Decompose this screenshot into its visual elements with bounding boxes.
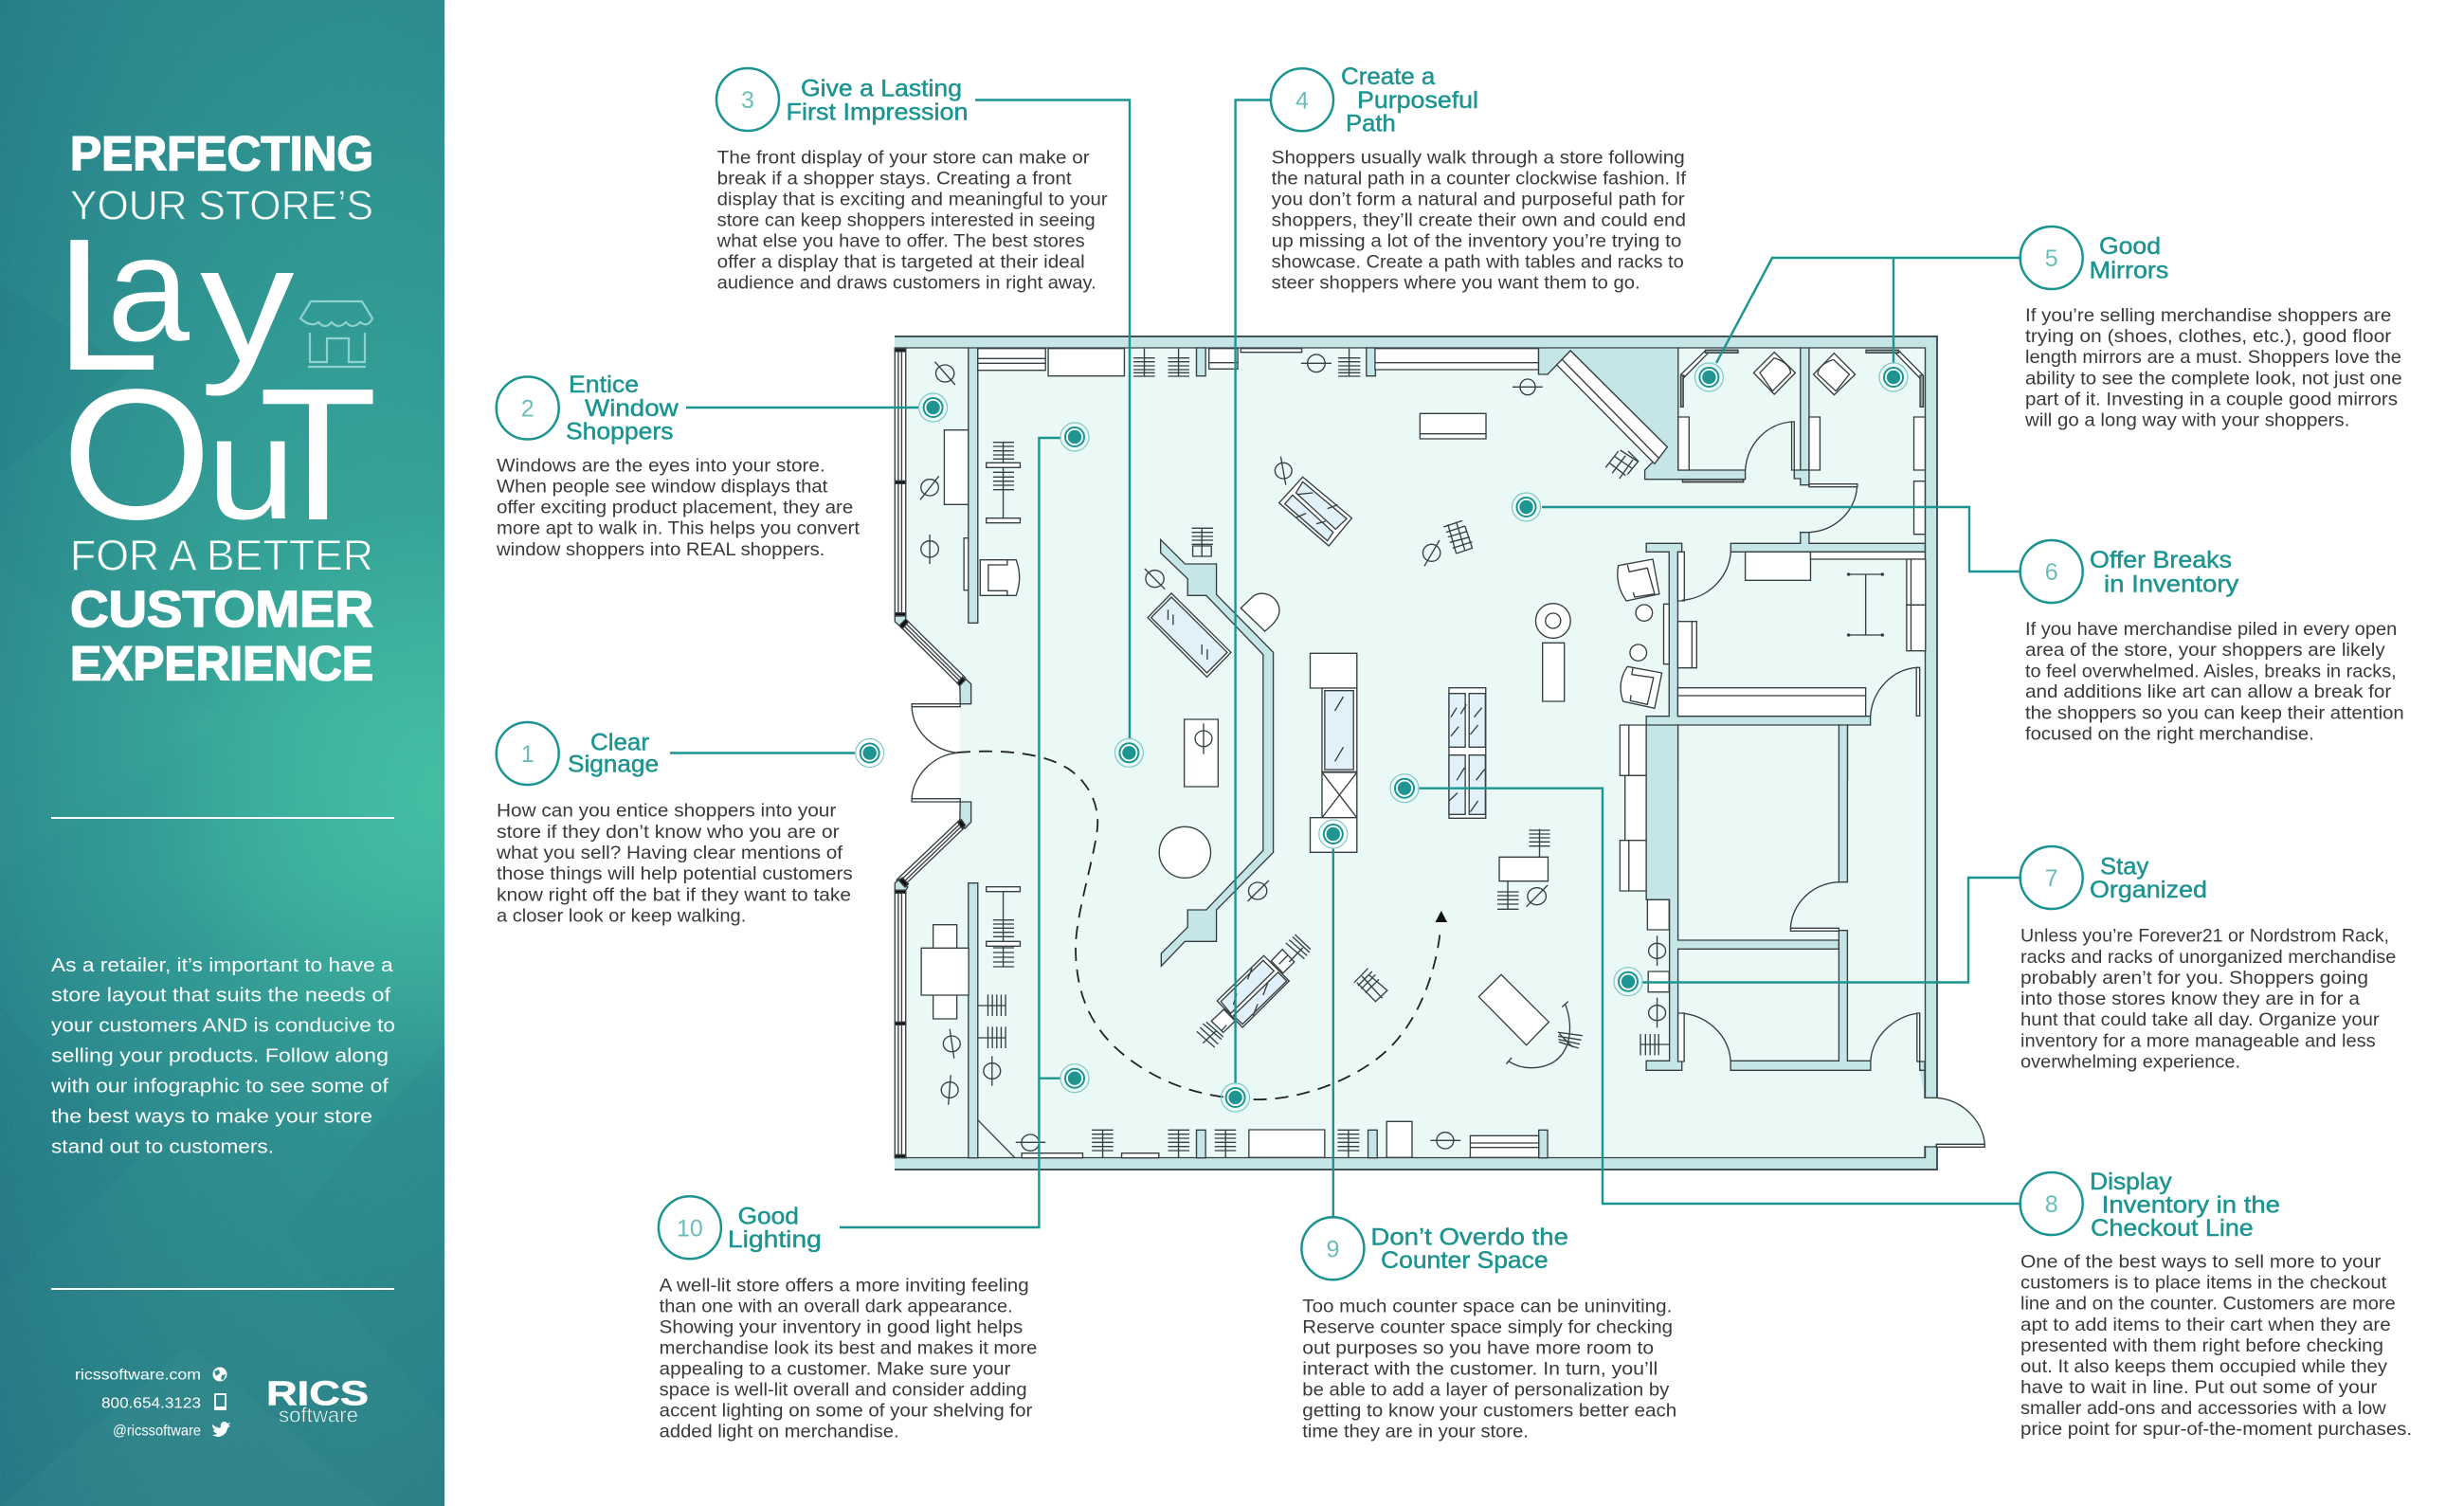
body 9: Too much counter space can be uninviting. bbox=[1302, 1296, 1672, 1316]
body 1: what you sell? Having clear mentions of bbox=[496, 843, 843, 863]
body 8: apt to add items to their cart when they are bbox=[2020, 1315, 2391, 1335]
marker 5b bbox=[1879, 363, 1908, 391]
bottom wall right fixtures bbox=[1430, 1130, 1548, 1158]
heading 2: Shoppers bbox=[566, 419, 673, 445]
body 5 bbox=[2024, 305, 2402, 431]
icon: storefront bbox=[300, 301, 372, 367]
body 10: space is well-lit overall and consider adding bbox=[660, 1380, 1027, 1401]
heading 4: Create a bbox=[1341, 64, 1435, 90]
heading 3: Give a Lasting bbox=[801, 76, 962, 102]
body 8 bbox=[2020, 1251, 2412, 1440]
body 4: shoppers, they’ll create their own and could end bbox=[1272, 210, 1686, 231]
title: L bbox=[55, 200, 160, 410]
back room walls bbox=[1646, 533, 1926, 780]
body 9: out purposes so you have more room to bbox=[1302, 1338, 1654, 1359]
body 9: getting to know your customers better each bbox=[1302, 1401, 1676, 1422]
heading 5: Mirrors bbox=[2090, 257, 2168, 283]
panel: tip 4 purposeful path bbox=[1271, 64, 1687, 294]
body 9: interact with the customer. In turn, you’ll bbox=[1302, 1359, 1658, 1380]
heading 9: Counter Space bbox=[1381, 1247, 1549, 1274]
body 1: know right off the bat if they want to take bbox=[497, 884, 851, 905]
body 6 bbox=[2025, 619, 2404, 745]
intro paragraph: with our infographic to see some of bbox=[50, 1077, 389, 1098]
lower clothing rack bbox=[987, 887, 1020, 968]
heading 10 bbox=[728, 1203, 822, 1253]
intro paragraph: your customers AND is conducive to bbox=[51, 1016, 395, 1037]
intro paragraph: stand out to customers. bbox=[51, 1137, 274, 1158]
heading 8: Display bbox=[2090, 1169, 2172, 1195]
body 8: have to wait in line. Put out some of your bbox=[2020, 1377, 2378, 1398]
heading 9 bbox=[1370, 1224, 1568, 1274]
panel: tip 6 breaks in inventory bbox=[2020, 540, 2404, 745]
title: a bbox=[107, 206, 190, 372]
body 6: area of the store, your shoppers are likely bbox=[2025, 640, 2385, 661]
heading 6: Offer Breaks bbox=[2090, 547, 2232, 573]
shopper path dashed arrow bbox=[957, 752, 1447, 1099]
panel: left sidebar bbox=[0, 0, 444, 1506]
marker 1 bbox=[856, 739, 884, 768]
intro paragraph bbox=[50, 955, 395, 1158]
marker 3 bbox=[1114, 738, 1143, 767]
body 9 bbox=[1302, 1296, 1676, 1442]
body 4: the natural path in a counter clockwise fashion. If bbox=[1272, 169, 1687, 190]
body 2 bbox=[496, 455, 861, 560]
body 10: accent lighting on some of your shelving for bbox=[660, 1401, 1033, 1422]
checkout fixtures bbox=[1640, 899, 1670, 1055]
heading 2 bbox=[566, 372, 679, 445]
round table bbox=[1159, 826, 1210, 878]
window display furniture bbox=[920, 362, 969, 590]
body 4: showcase. Create a path with tables and racks to bbox=[1272, 252, 1684, 273]
lower hanger beside wall bbox=[1247, 880, 1269, 901]
body 10 bbox=[660, 1275, 1037, 1442]
top-left zone fixtures bbox=[895, 348, 1375, 966]
contact details: ricssoftware.com bbox=[75, 1367, 201, 1384]
body 1: How can you entice shoppers into your bbox=[497, 801, 837, 822]
body 3: display that is exciting and meaningful to your bbox=[717, 190, 1108, 210]
heading 2: Entice bbox=[569, 372, 639, 398]
back wall strip bbox=[1646, 725, 1839, 1070]
panel: tip 8 checkout line bbox=[2020, 1169, 2412, 1440]
central partition wall bbox=[1161, 539, 1274, 966]
number badge 4 bbox=[1271, 68, 1333, 131]
body 2: offer exciting product placement, they are bbox=[497, 497, 853, 517]
body 2: more apt to walk in. This helps you convert bbox=[497, 518, 861, 539]
bottom-left zone fixtures bbox=[895, 753, 1412, 1158]
top wall shelf bbox=[1375, 349, 1538, 370]
heading 10: Lighting bbox=[728, 1226, 822, 1253]
logo: RICS software: software bbox=[279, 1403, 358, 1427]
heading 8: Checkout Line bbox=[2091, 1215, 2254, 1242]
heading 3 bbox=[787, 76, 969, 125]
heading 8 bbox=[2090, 1169, 2280, 1242]
heading 6: in Inventory bbox=[2104, 571, 2239, 597]
title: YOUR STORE’S bbox=[70, 182, 373, 229]
body 6: and additions like art can allow a break for bbox=[2025, 681, 2392, 702]
marker 10a bbox=[1060, 423, 1089, 451]
title: T bbox=[259, 349, 377, 559]
checkout counter top bbox=[1310, 653, 1357, 771]
title: y bbox=[200, 210, 295, 396]
body 7: hunt that could take all day. Organize your bbox=[2020, 1009, 2380, 1030]
half-round display bbox=[1241, 593, 1279, 631]
marker 6 bbox=[1513, 493, 1541, 521]
heading 1: Clear bbox=[590, 730, 649, 756]
logo: RICS software bbox=[266, 1374, 369, 1427]
number badge 2: 2 bbox=[521, 396, 534, 423]
heading 9: Don’t Overdo the bbox=[1370, 1224, 1568, 1250]
body 2: window shoppers into REAL shoppers. bbox=[496, 539, 824, 560]
panel: tip 9 counter space bbox=[1301, 1217, 1676, 1442]
body 1 bbox=[496, 801, 853, 927]
top-right zone rooms bbox=[1375, 348, 1926, 780]
title: O bbox=[62, 352, 212, 558]
body 6: to feel overwhelmed. Aisles, breaks in racks, bbox=[2025, 661, 2397, 681]
number badge 8 bbox=[2020, 1172, 2083, 1235]
angled table with curved rack bbox=[1478, 974, 1583, 1068]
body 3: break if a shopper stays. Creating a front bbox=[717, 169, 1072, 190]
body 3: store can keep shoppers interested in seeing bbox=[717, 210, 1096, 231]
partition wall lower bbox=[969, 883, 978, 1158]
body 5: part of it. Investing in a couple good mirrors bbox=[2025, 389, 2398, 409]
number badge 2 bbox=[497, 377, 559, 440]
body 7: inventory for a more manageable and less bbox=[2020, 1030, 2376, 1051]
body 1: a closer look or keep walking. bbox=[497, 906, 746, 927]
contact details bbox=[75, 1367, 201, 1439]
contact details: 800.654.3123 bbox=[101, 1395, 201, 1412]
body 7: racks and racks of unorganized merchandise bbox=[2020, 947, 2396, 968]
panel: tip 10 good lighting bbox=[659, 1196, 1037, 1442]
wall racks bbox=[978, 994, 1006, 1048]
body 8: out. It also keeps them occupied while they bbox=[2020, 1356, 2387, 1377]
title bbox=[55, 127, 377, 690]
heading 10: Good bbox=[738, 1203, 799, 1229]
body 5: length mirrors are a must. Shoppers love the bbox=[2025, 347, 2401, 368]
body 8: price point for spur-of-the-moment purchases. bbox=[2020, 1419, 2412, 1440]
heading 7 bbox=[2090, 854, 2207, 903]
body 10: merchandise look its best and makes it more bbox=[660, 1338, 1037, 1359]
number badge 10 bbox=[659, 1196, 721, 1259]
body 10: added light on merchandise. bbox=[660, 1422, 899, 1442]
window wall lower bbox=[895, 753, 971, 1158]
display table with hanger bbox=[1185, 719, 1218, 787]
body 9: time they are in your store. bbox=[1302, 1422, 1529, 1442]
clothing rack bbox=[987, 442, 1020, 523]
body 8: presented with them right before checking bbox=[2020, 1335, 2383, 1356]
heading 1 bbox=[568, 730, 659, 777]
lower hangers bbox=[941, 1029, 1015, 1158]
floor area bbox=[895, 336, 1984, 1170]
icon: phone bbox=[215, 1394, 226, 1409]
number badge 4: 4 bbox=[1295, 87, 1309, 114]
heading 5: Good bbox=[2099, 233, 2161, 260]
marker 8 bbox=[1390, 774, 1419, 803]
body 4: up missing a lot of the inventory you’re trying to bbox=[1272, 231, 1682, 252]
partition wall left bbox=[969, 348, 978, 623]
icon: twitter bbox=[212, 1422, 230, 1437]
number badge 1 bbox=[497, 722, 559, 785]
number badge 6: 6 bbox=[2045, 559, 2058, 586]
hanger and shelf bbox=[1420, 379, 1543, 439]
title: EXPERIENCE bbox=[70, 637, 373, 690]
top wall shelves and racks bbox=[978, 348, 1375, 376]
number badge 3: 3 bbox=[741, 87, 754, 114]
number badge 8: 8 bbox=[2045, 1191, 2058, 1218]
panel: tip 2 entice window shoppers bbox=[496, 372, 861, 560]
connector lines bbox=[670, 100, 2020, 1227]
contact details: @ricssoftware bbox=[113, 1424, 201, 1439]
number badge 3 bbox=[716, 68, 779, 131]
small rack bbox=[1191, 528, 1213, 556]
heading 7: Stay bbox=[2100, 854, 2149, 880]
heading 8: Inventory in the bbox=[2102, 1192, 2280, 1219]
body 5: will go a long way with your shoppers. bbox=[2024, 410, 2349, 431]
heading 4: Purposeful bbox=[1357, 87, 1478, 114]
body 7: into those stores know they are in for a bbox=[2020, 989, 2360, 1009]
body 3: The front display of your store can make or bbox=[717, 148, 1090, 169]
body 4: you don’t form a natural and purposeful path for bbox=[1272, 190, 1685, 210]
body 5: trying on (shoes, clothes, etc.), good floor bbox=[2025, 326, 2392, 347]
lounge chairs and tables bbox=[1535, 559, 1662, 708]
number badge 6 bbox=[2020, 540, 2083, 603]
heading 7: Organized bbox=[2090, 877, 2207, 903]
body 7: Unless you’re Forever21 or Nordstrom Rack, bbox=[2020, 926, 2389, 947]
body 4: Shoppers usually walk through a store following bbox=[1272, 148, 1685, 169]
wall display cabinets bbox=[1620, 725, 1646, 891]
body 5: If you’re selling merchandise shoppers are bbox=[2025, 305, 2391, 326]
marker 5a bbox=[1694, 363, 1723, 391]
chair bbox=[980, 560, 1020, 595]
window wall upper bbox=[895, 348, 971, 753]
body 3: audience and draws customers in right away. bbox=[717, 273, 1096, 294]
body 3: what else you have to offer. The best stores bbox=[716, 231, 1085, 252]
body 4 bbox=[1272, 148, 1687, 294]
body 8: One of the best ways to sell more to your bbox=[2020, 1251, 2382, 1272]
floor plan bbox=[895, 336, 1984, 1170]
heading 3: First Impression bbox=[787, 99, 969, 125]
body 9: Reserve counter space simply for checking bbox=[1302, 1316, 1673, 1337]
marker 4 bbox=[1222, 1083, 1250, 1112]
panel: tip 3 lasting first impression bbox=[716, 68, 1108, 294]
number badge 7: 7 bbox=[2045, 865, 2058, 892]
body 6: the shoppers so you can keep their attention bbox=[2025, 702, 2404, 723]
heading 1: Signage bbox=[568, 751, 659, 777]
body 6: focused on the right merchandise. bbox=[2025, 724, 2314, 745]
body 8: line and on the counter. Customers are more bbox=[2020, 1293, 2396, 1314]
body 2: When people see window displays that bbox=[497, 477, 828, 498]
glass table angled bbox=[1275, 457, 1351, 546]
intro paragraph: As a retailer, it’s important to have a bbox=[51, 955, 394, 976]
logo: RICS software: RICS bbox=[266, 1374, 369, 1412]
heading 2: Window bbox=[585, 395, 679, 422]
body 8: customers is to place items in the checkout bbox=[2020, 1272, 2387, 1293]
number badge 1: 1 bbox=[521, 741, 534, 768]
body 3 bbox=[716, 148, 1108, 294]
body 8: smaller add-ons and accessories with a low bbox=[2020, 1398, 2387, 1419]
title: FOR A BETTER bbox=[70, 531, 373, 580]
body 1: those things will help potential customers bbox=[497, 863, 853, 884]
corner wall bbox=[1538, 348, 1746, 480]
heading 6 bbox=[2090, 547, 2239, 597]
structural walls bbox=[895, 336, 1937, 1170]
lower left display table bbox=[921, 925, 969, 1019]
glass table bbox=[1145, 569, 1231, 677]
checkout counter bottom bbox=[1310, 772, 1357, 852]
body 4: steer shoppers where you want them to go. bbox=[1272, 273, 1640, 294]
bottom-right zone rooms bbox=[1430, 688, 1984, 1158]
number badge 9 bbox=[1301, 1217, 1364, 1279]
number badge 5 bbox=[2020, 227, 2083, 289]
body 2: Windows are the eyes into your store. bbox=[497, 455, 825, 476]
body 10: A well-lit store offers a more inviting feeling bbox=[660, 1275, 1029, 1296]
bottom wall fixtures bbox=[1016, 1121, 1412, 1158]
body 10: appealing to a customer. Make sure your bbox=[660, 1359, 1011, 1380]
number badge 9: 9 bbox=[1326, 1236, 1339, 1262]
marker 7 bbox=[1614, 968, 1642, 996]
angled glass display bbox=[1197, 934, 1311, 1047]
body 7: probably aren’t for you. Shoppers going bbox=[2020, 968, 2368, 989]
body 7: overwhelming experience. bbox=[2020, 1052, 2240, 1073]
panel: tip 1 clear signage bbox=[496, 722, 853, 927]
heading 4 bbox=[1341, 64, 1478, 136]
body 3: offer a display that is targeted at their ideal bbox=[717, 252, 1085, 273]
center right table with racks bbox=[1497, 829, 1550, 910]
intro paragraph: the best ways to make your store bbox=[51, 1107, 372, 1128]
intro paragraph: selling your products. Follow along bbox=[51, 1046, 389, 1067]
intro paragraph: store layout that suits the needs of bbox=[51, 986, 391, 1007]
icon: globe bbox=[212, 1367, 227, 1382]
fitting rooms bbox=[1678, 348, 1925, 535]
sidebar background bbox=[0, 0, 444, 1506]
marker 10b bbox=[1060, 1064, 1089, 1093]
doors bbox=[1678, 882, 1984, 1157]
title: CUSTOMER bbox=[70, 581, 373, 638]
panel: tip 7 stay organized bbox=[2020, 846, 2396, 1073]
body 6: If you have merchandise piled in every open bbox=[2025, 619, 2397, 640]
body 9: be able to add a layer of personalization by bbox=[1302, 1380, 1670, 1401]
angled rack with hanger bbox=[1422, 520, 1472, 566]
marker 9 bbox=[1319, 820, 1348, 848]
body 5: ability to see the complete look, not just one bbox=[2025, 368, 2402, 389]
panel: tip 5 good mirrors bbox=[2020, 227, 2402, 431]
number badge 7 bbox=[2020, 846, 2083, 909]
glass cases bbox=[1449, 688, 1486, 818]
heading 5 bbox=[2090, 233, 2168, 283]
body 7 bbox=[2020, 926, 2396, 1073]
diagonal shelf bbox=[1557, 351, 1667, 479]
marker 2 bbox=[919, 393, 948, 422]
body 10: Showing your inventory in good light helps bbox=[660, 1316, 1024, 1337]
number badge 5: 5 bbox=[2045, 245, 2058, 272]
small angled rack bbox=[1354, 969, 1387, 1002]
number badge 10: 10 bbox=[677, 1215, 703, 1242]
title: u bbox=[207, 387, 296, 550]
title: PERFECTING bbox=[70, 127, 373, 180]
body 10: than one with an overall dark appearance. bbox=[660, 1296, 1013, 1316]
body 1: store if they don’t know who you are or bbox=[497, 822, 840, 843]
heading 4: Path bbox=[1346, 110, 1396, 136]
